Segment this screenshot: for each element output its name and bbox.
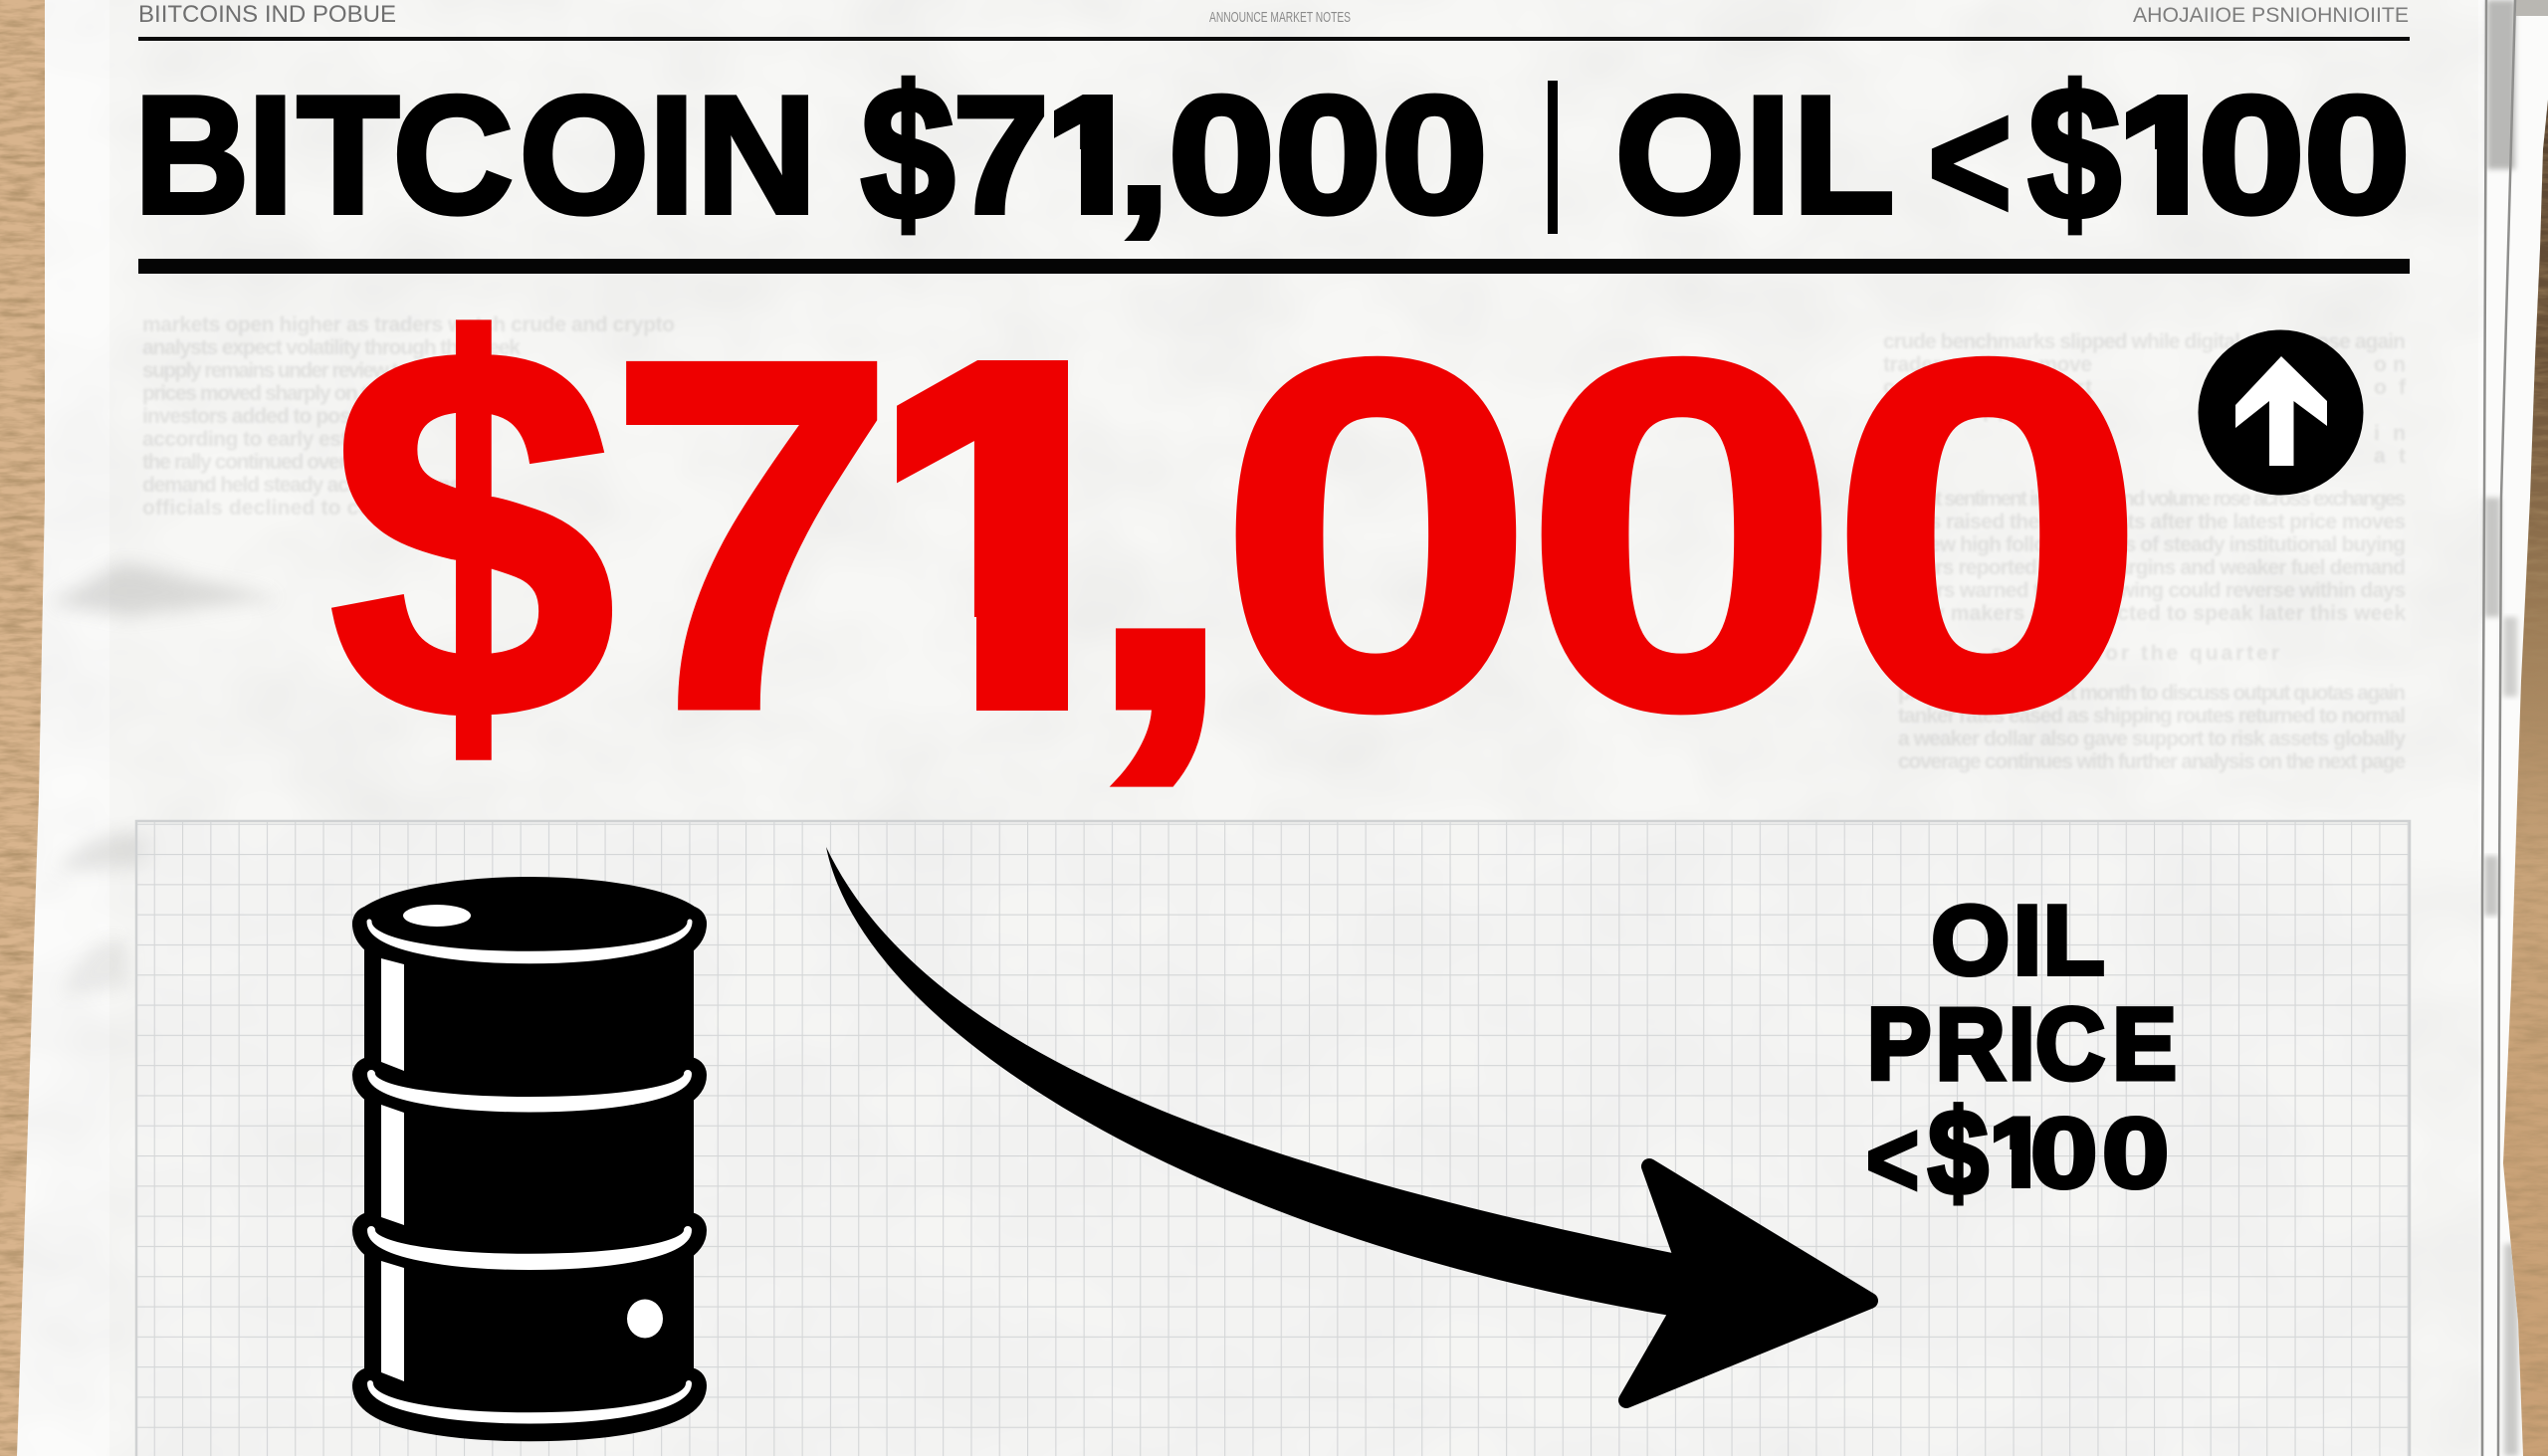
faint show-through newspaper text: tanker rates eased as shipping routes returned to normal	[1898, 705, 2406, 728]
faint show-through newspaper text: outlook for the quarter	[1991, 642, 2279, 665]
faint show-through newspaper text: in	[2374, 422, 2406, 445]
faint show-through newspaper text: demand held steady across regions	[142, 474, 461, 497]
oil price label: 1	[1985, 1097, 2052, 1209]
oil price label: $	[1928, 1084, 1989, 1220]
icon: up arrow in black circle	[2198, 330, 2363, 496]
headline: 00	[2198, 63, 2411, 249]
arrow: oil falling	[826, 847, 1870, 1400]
faint show-through newspaper text	[142, 313, 2407, 773]
thick headline rule	[138, 259, 2410, 274]
headline: B	[134, 62, 249, 248]
top strap: right label: AHOJAIIOE PSNIOHNIOIITE	[2133, 4, 2409, 27]
faint show-through newspaper text: the rally continued overnight	[142, 451, 391, 474]
oil price label: PRICE	[1867, 988, 2177, 1102]
faint show-through newspaper text: investors added to positions	[142, 405, 401, 428]
faint show-through newspaper text: markets open higher as traders watch crude and crypto	[142, 313, 675, 336]
faint show-through newspaper text: at	[2374, 445, 2406, 468]
oil price label: OIL	[1932, 887, 2104, 995]
faint show-through newspaper text: coverage continues with further analysis on the next page	[1898, 750, 2406, 773]
stacked page edges	[2482, 0, 2548, 1456]
headline: $	[2028, 48, 2121, 259]
top strap: centre label: ANNOUNCE MARKET NOTES	[1209, 9, 1351, 26]
faint show-through newspaper text: producers meet next month to discuss output quotas again	[1898, 682, 2406, 705]
headline: 1	[1039, 63, 1147, 249]
big bitcoin price: 1	[853, 258, 1169, 811]
thin top rule	[138, 37, 2410, 41]
headline: <	[1928, 69, 2012, 255]
faint show-through newspaper text: a weaker dollar also gave support to risk assets globally	[1898, 728, 2406, 750]
top strap: left label: BIITCOINS IND POBUE	[138, 1, 396, 28]
faint show-through newspaper text: market sentiment improved and volume rose across exchanges	[1883, 488, 2406, 511]
icon: oil barrel	[352, 877, 707, 1423]
headline: ITCOIN	[247, 62, 817, 249]
faint show-through newspaper text: refiners reported softer margins and weaker fuel demand	[1883, 556, 2406, 579]
faint show-through newspaper text: came after a report	[1883, 376, 2092, 399]
paper wrinkles	[50, 565, 279, 995]
headline: OIL	[1614, 62, 1895, 249]
oil price label: 00	[2030, 1097, 2170, 1209]
headline divider	[1548, 81, 1558, 234]
headline	[142, 76, 2407, 241]
faint show-through newspaper text: traders said the move	[1883, 353, 2092, 376]
headline: 1	[2114, 63, 2222, 249]
big bitcoin price: 7	[608, 257, 896, 811]
faint show-through newspaper text: banks raised their forecasts after the latest price moves	[1883, 511, 2406, 533]
faint show-through newspaper text: fresh supply	[1883, 399, 2032, 422]
faint show-through newspaper text: of	[2374, 376, 2407, 399]
big bitcoin price: $	[329, 239, 615, 830]
faint show-through newspaper text: the new high follows weeks of steady institutional buying	[1883, 533, 2406, 556]
oil price label	[1868, 903, 2176, 1206]
big bitcoin price	[330, 319, 2128, 787]
oil price label: <	[1866, 1101, 1919, 1217]
faint show-through newspaper text: prices moved sharply on the news	[142, 382, 441, 405]
big bitcoin price: ,000	[1081, 258, 2146, 811]
headline: ,000	[1117, 63, 1488, 249]
faint show-through newspaper text: according to early estimates	[142, 428, 411, 451]
panel: oil price graph paper	[136, 821, 2410, 1456]
faint show-through newspaper text: brokers warned that the swing could reverse within days	[1883, 579, 2406, 602]
faint show-through newspaper text: analysts expect volatility through the week	[142, 336, 521, 359]
faint show-through newspaper text: officials declined to comment	[142, 497, 441, 520]
headline: $	[861, 49, 955, 260]
faint show-through newspaper text: crude benchmarks slipped while digital assets rose again	[1883, 330, 2406, 353]
faint show-through newspaper text: policy makers are expected to speak later this week	[1883, 602, 2406, 625]
faint show-through newspaper text: on	[2374, 353, 2406, 376]
headline: 7	[953, 63, 1049, 249]
faint show-through newspaper text: supply remains under review today	[142, 359, 441, 382]
